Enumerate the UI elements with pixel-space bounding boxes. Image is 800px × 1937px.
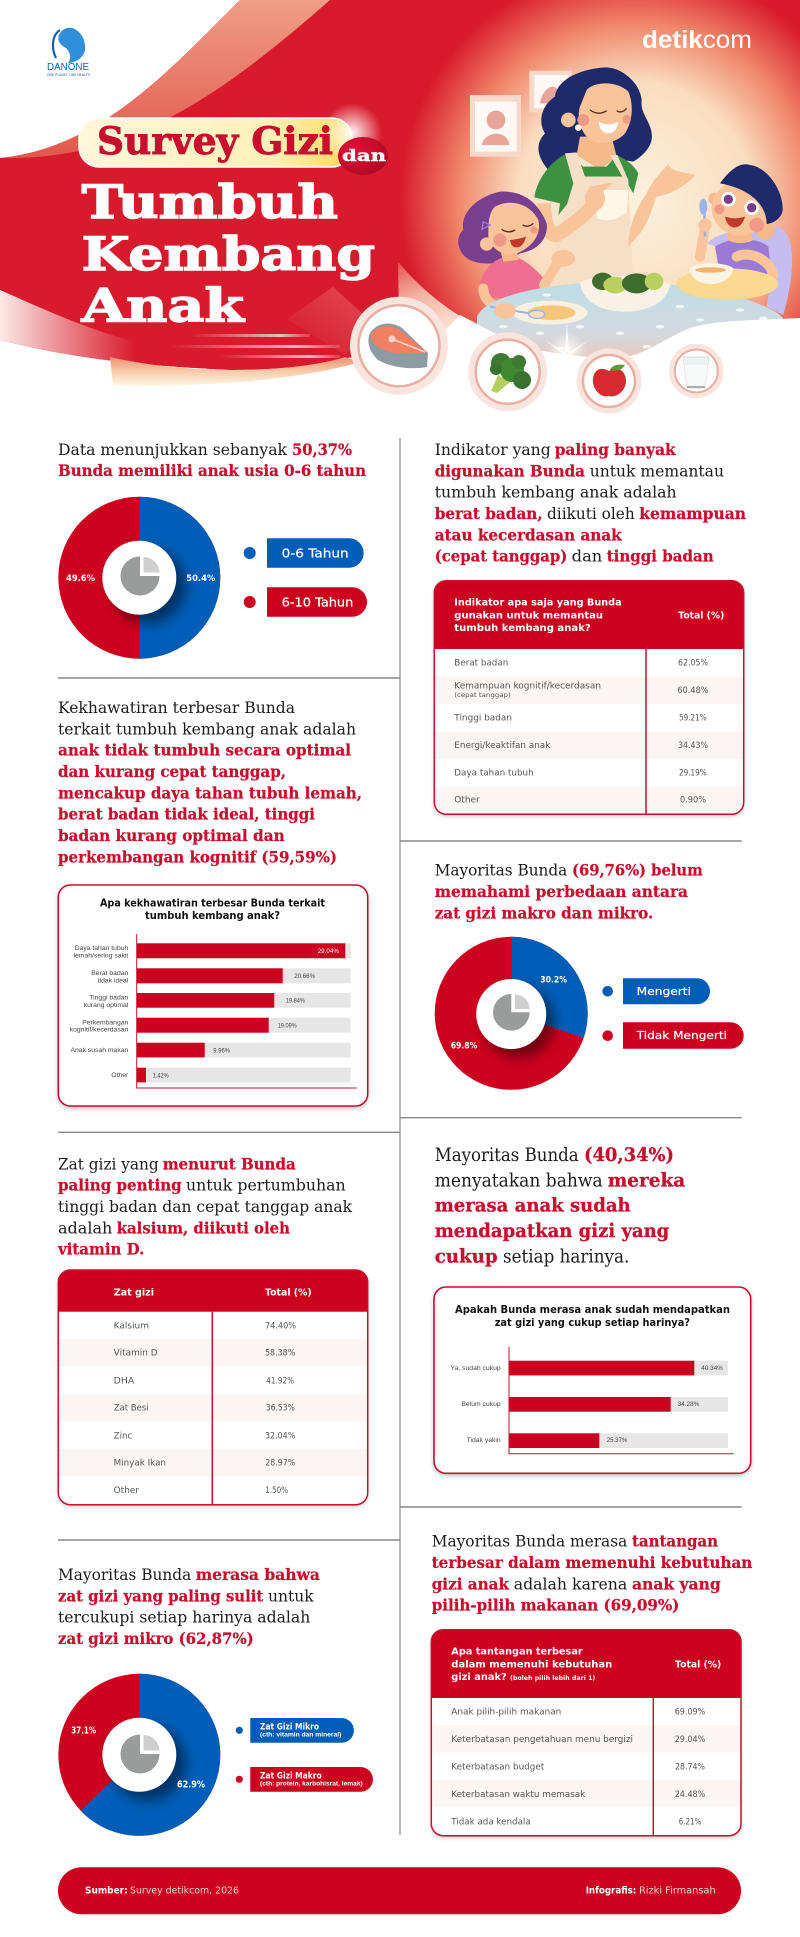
table rows: 62.05%: [678, 659, 708, 669]
table rows: Energi/keaktifan anak: [454, 741, 550, 751]
top peach swoosh: [0, 0, 330, 158]
panel: kecukupan gizi: [434, 1144, 751, 1473]
panel: gizi makro mikro: [435, 861, 744, 1090]
danone logo: [47, 28, 90, 77]
salad bowl: [580, 273, 670, 312]
table rows: Vitamin D: [114, 1349, 158, 1359]
title: Tumbuh Kembang Anak: Tumbuh: [82, 175, 338, 229]
heading: untuk pertumbuhan: [186, 1176, 346, 1195]
legend: [602, 978, 744, 1049]
heading: kalsium, diikuti oleh: [117, 1218, 290, 1237]
table rows: [453, 659, 709, 806]
heading: atau kecerdasan anak: [435, 525, 623, 544]
category labels: Belum cukup: [461, 1401, 501, 1408]
heading: tinggi badan dan cepat tanggap anak: [58, 1197, 352, 1216]
heading: paling banyak: [555, 440, 677, 459]
table rows: 32.04%: [265, 1431, 295, 1441]
heading: cukup: [435, 1245, 498, 1267]
heading: mencakup daya tahan tubuh lemah,: [58, 783, 362, 802]
heading: [435, 440, 746, 566]
panel: usia anak: [58, 440, 367, 659]
table rows: 28.74%: [675, 1762, 705, 1772]
table: tantangan: [431, 1630, 741, 1836]
infographic credit: [586, 1886, 716, 1897]
table rows: Other: [114, 1486, 139, 1496]
table rows: 0.90%: [680, 796, 706, 806]
donut chart: [435, 937, 588, 1090]
table rows: Kemampuan kognitif/kecerdasan: [454, 681, 601, 691]
chart title: [100, 898, 325, 922]
table rows: Anak pilih-pilih makanan: [451, 1708, 561, 1718]
legend: (cth: vitamin dan mineral): [260, 1732, 341, 1739]
heading: [432, 1532, 753, 1615]
infographic credit: Rizki Firmansah: [639, 1886, 716, 1897]
heading: Mayoritas Bunda merasa: [432, 1532, 628, 1551]
bars: [137, 934, 357, 1088]
heading: 50,37%: [292, 440, 352, 459]
category labels: kognitif/kecerdasan: [70, 1026, 129, 1034]
heading: Data menunjukkan sebanyak: [58, 440, 287, 459]
donut chart: [58, 1674, 220, 1836]
footer bar: [58, 1867, 741, 1914]
infographic credit: Infografis:: [586, 1886, 636, 1897]
light streaks: [170, 334, 340, 358]
table rows: Zinc: [114, 1431, 133, 1441]
legend: Zat Gizi Mikro: [260, 1722, 319, 1732]
table rows: Zat Besi: [114, 1404, 149, 1414]
category labels: Anak susah makan: [70, 1047, 129, 1054]
heading: (cepat tanggap): [435, 547, 567, 566]
title pill: Survey Gizi: [79, 103, 382, 167]
heading: [435, 861, 703, 922]
heading: adalah: [58, 1218, 112, 1237]
heading: berat badan tidak ideal, tinggi: [58, 805, 315, 824]
wall frame left: [470, 95, 521, 157]
title pill: Survey Gizi: Survey Gizi: [97, 119, 333, 163]
heading: [58, 1565, 320, 1648]
bottom-left orange band: [110, 357, 360, 386]
title: Tumbuh Kembang Anak: [80, 175, 375, 333]
heading: tumbuh kembang anak adalah: [435, 483, 677, 502]
heading: (69,76%) belum: [572, 861, 703, 880]
table rows: Keterbatasan budget: [451, 1762, 545, 1772]
donut chart: 30.2%: [540, 975, 567, 985]
legend: Mengerti: [637, 985, 691, 998]
legend: Tidak Mengerti: [636, 1029, 727, 1042]
table rows: Berat badan: [454, 659, 508, 669]
white wave under illustration: [400, 315, 800, 420]
legend: [244, 538, 367, 617]
detikcom logo: detikcom: [642, 26, 752, 54]
heading: menyatakan bahwa: [435, 1169, 603, 1191]
wall frame right: [529, 71, 572, 112]
heading: zat gizi makro dan mikro.: [435, 903, 653, 922]
category labels: Tinggi badan: [89, 994, 129, 1002]
category labels: Daya tahan tubuh: [75, 945, 129, 952]
table rows: 29.19%: [679, 768, 707, 778]
category labels: Other: [111, 1072, 129, 1079]
table rows: 60.48%: [677, 686, 709, 696]
dining table: [477, 282, 783, 373]
bar chart card: [58, 885, 368, 1106]
donut chart: [58, 497, 220, 659]
title: Tumbuh Kembang Anak: Kembang: [82, 227, 375, 281]
hero background: [0, 0, 800, 372]
heading: zat gizi yang paling sulit: [58, 1586, 264, 1605]
category labels: kurang optimal: [84, 1002, 129, 1009]
table header: Zat gizi: [114, 1287, 154, 1298]
heading: terbesar dalam memenuhi kebutuhan: [432, 1553, 753, 1572]
peach band beside salmon: [398, 262, 470, 372]
legend: (cth: protein, karbohisrat, lemak): [260, 1781, 363, 1788]
table header: gunakan untuk memantau: [454, 610, 603, 621]
category labels: Berat badan: [91, 970, 129, 977]
girl's plate: [490, 301, 587, 325]
danone logo: DANONE: [47, 62, 89, 73]
table rows: 41.92%: [266, 1376, 294, 1386]
legend: [236, 1718, 373, 1792]
danone logo: ONE PLANET. ONE HEALTH: [47, 73, 90, 77]
bottom-left fading swoosh: [0, 290, 233, 370]
heading: diikuti oleh: [547, 504, 635, 523]
table rows: DHA: [114, 1376, 134, 1386]
heading: anak yang: [632, 1574, 721, 1593]
heading: Kekhawatiran terbesar Bunda: [58, 698, 295, 717]
table header: [454, 598, 724, 634]
value labels: 34.28%: [678, 1401, 699, 1408]
food icon: glass of milk: [669, 344, 724, 398]
table rows: Keterbatasan pengetahuan menu bergizi: [451, 1735, 633, 1745]
girl: [458, 192, 575, 310]
value labels: [607, 1365, 723, 1444]
heading: Bunda memiliki anak usia 0-6 tahun: [58, 461, 366, 480]
value labels: 19.09%: [278, 1022, 297, 1030]
table rows: [450, 1708, 705, 1827]
heading: digunakan Bunda: [435, 461, 585, 480]
category labels: [70, 945, 129, 1079]
heading: mereka: [608, 1169, 685, 1191]
heading: [435, 1144, 685, 1267]
boy's tray and bowl: [676, 263, 778, 300]
heading: adalah karena: [514, 1574, 628, 1593]
heading: merasa bahwa: [196, 1565, 320, 1584]
table rows: (cepat tanggap): [454, 692, 511, 699]
heading: paling penting: [58, 1176, 182, 1195]
legend: Zat Gizi Makro: [260, 1771, 322, 1781]
table header: Apa tantangan terbesar: [451, 1647, 583, 1658]
heading: vitamin D.: [57, 1240, 144, 1259]
sparkle under table: [545, 322, 589, 372]
table header: dalam memenuhi kebutuhan: [451, 1659, 612, 1670]
food icon: broccoli: [468, 332, 547, 411]
category labels: lemah/sering sakit: [74, 952, 128, 960]
heading: setiap harinya.: [503, 1245, 629, 1267]
panel: tantangan terbesar: [431, 1532, 753, 1836]
chart title: Apa kekhawatiran terbesar Bunda terkait: [100, 898, 325, 909]
table rows: 36.53%: [266, 1404, 295, 1414]
category labels: Tidak yakin: [467, 1437, 501, 1444]
heading: dan kurang cepat tanggap,: [58, 762, 286, 781]
heading: Zat gizi yang: [58, 1154, 159, 1173]
table header: gizi anak?: [451, 1672, 507, 1683]
heading: Indikator yang: [435, 440, 551, 459]
value labels: 9.96%: [213, 1048, 230, 1054]
table rows: 59.21%: [679, 713, 707, 723]
table rows: Tidak ada kendala: [450, 1817, 531, 1827]
table rows: 58.38%: [265, 1349, 295, 1359]
table rows: Minyak Ikan: [114, 1459, 166, 1469]
heading: [58, 440, 366, 480]
table rows: 34.43%: [678, 741, 708, 751]
category labels: [451, 1365, 501, 1444]
heading: tercukupi setiap harinya adalah: [58, 1608, 310, 1627]
table rows: 29.04%: [675, 1735, 705, 1745]
heading: berat badan,: [435, 504, 543, 523]
panel: zat gizi sulit tercukupi: [58, 1565, 373, 1836]
center vertical divider: [399, 438, 401, 1835]
source credit: Survey detikcom, 2026: [130, 1886, 239, 1897]
table: indikator: [434, 581, 744, 814]
table rows: 74.40%: [265, 1321, 296, 1331]
table header: Total (%): [678, 610, 724, 621]
heading: pilih-pilih makanan (69,09%): [432, 1596, 679, 1615]
heading: untuk: [268, 1586, 314, 1605]
category labels: tidak ideal: [98, 978, 129, 984]
chart title: [455, 1305, 730, 1329]
bars: [509, 1347, 734, 1454]
table rows: Tinggi badan: [453, 713, 512, 723]
value labels: 29.04%: [318, 948, 339, 955]
table rows: 69.09%: [675, 1708, 705, 1718]
chart title: zat gizi yang cukup setiap harinya?: [495, 1318, 690, 1329]
value labels: 1.42%: [153, 1072, 169, 1080]
illustration: family at dining table: [458, 67, 792, 373]
title badge: dan: dan: [342, 146, 386, 165]
food icon: salmon: [350, 297, 448, 395]
diagonal light band: [287, 287, 375, 355]
table rows: [114, 1321, 296, 1496]
heading: anak tidak tumbuh secara optimal: [58, 741, 351, 760]
heading: mendapatkan gizi yang: [435, 1220, 669, 1242]
heading: Mayoritas Bunda: [435, 861, 568, 880]
panel: indikator pemantauan: [434, 440, 746, 814]
category labels: Ya, sudah cukup: [451, 1365, 501, 1372]
value labels: 19.84%: [286, 998, 305, 1004]
heading: untuk memantau: [590, 461, 724, 480]
heading: menurut Bunda: [163, 1154, 296, 1173]
table rows: Other: [454, 796, 480, 806]
table rows: Kalsium: [114, 1321, 149, 1331]
donut chart: 69.8%: [451, 1042, 478, 1052]
table rows: Daya tahan tubuh: [454, 768, 534, 778]
bar chart card: [434, 1287, 751, 1473]
mother: [534, 67, 695, 283]
category labels: Perkembangan: [82, 1020, 129, 1026]
donut chart: 37.1%: [71, 1726, 96, 1737]
heading: (40,34%): [584, 1144, 674, 1166]
source credit: [85, 1886, 239, 1897]
donut chart: 49.6%: [66, 574, 95, 584]
heading: terkait tumbuh kembang anak adalah: [58, 719, 356, 738]
table rows: 1.50%: [265, 1486, 288, 1496]
heading: Mayoritas Bunda: [435, 1144, 579, 1166]
panel: zat gizi penting: [57, 1154, 368, 1505]
heading: perkembangan kognitif (59,59%): [58, 847, 337, 866]
heading: merasa anak sudah: [435, 1195, 631, 1217]
chart title: Apakah Bunda merasa anak sudah mendapatkan: [455, 1305, 730, 1316]
table header: (boleh pilih lebih dari 1): [510, 1675, 596, 1682]
heading: gizi anak: [432, 1574, 510, 1593]
donut chart: 50.4%: [186, 574, 216, 584]
panel: kekhawatiran: [58, 698, 368, 1106]
legend: 0-6 Tahun: [282, 546, 349, 560]
heading: memahami perbedaan antara: [435, 882, 688, 901]
table rows: 24.48%: [675, 1790, 705, 1800]
donut chart: 62.9%: [177, 1779, 205, 1790]
value labels: 25.37%: [607, 1437, 627, 1444]
table header: [451, 1647, 721, 1683]
heading: [58, 698, 362, 866]
food icon: apple: [576, 348, 642, 414]
table rows: 6.21%: [679, 1817, 701, 1827]
table header: Indikator apa saja yang Bunda: [454, 598, 622, 609]
heading: tantangan: [632, 1532, 718, 1551]
table: zat gizi: [58, 1270, 368, 1505]
table rows: 28.97%: [265, 1459, 295, 1469]
heading: [57, 1154, 352, 1259]
table header: tumbuh kembang anak?: [454, 623, 591, 634]
source credit: Sumber:: [85, 1886, 128, 1897]
heading: zat gizi mikro (62,87%): [58, 1629, 254, 1648]
title badge: dan: [338, 137, 388, 175]
heading: Mayoritas Bunda: [58, 1565, 192, 1584]
title: Tumbuh Kembang Anak: Anak: [80, 279, 245, 333]
table rows: Keterbatasan waktu memasak: [451, 1790, 585, 1800]
table header: [114, 1287, 312, 1298]
heading: tinggi badan: [607, 547, 714, 566]
value labels: 20.66%: [294, 973, 315, 980]
legend: 6-10 Tahun: [282, 595, 353, 609]
chart title: tumbuh kembang anak?: [145, 911, 280, 922]
heading: badan kurang optimal dan: [58, 826, 285, 845]
value labels: [153, 948, 339, 1080]
panel: hero header: [0, 0, 800, 420]
heading: dan: [572, 547, 602, 566]
value labels: 40.34%: [701, 1365, 723, 1372]
table header: Total (%): [265, 1287, 312, 1298]
table header: Total (%): [675, 1659, 721, 1670]
heading: kemampuan: [639, 504, 746, 523]
boy in high chair: [698, 164, 792, 315]
